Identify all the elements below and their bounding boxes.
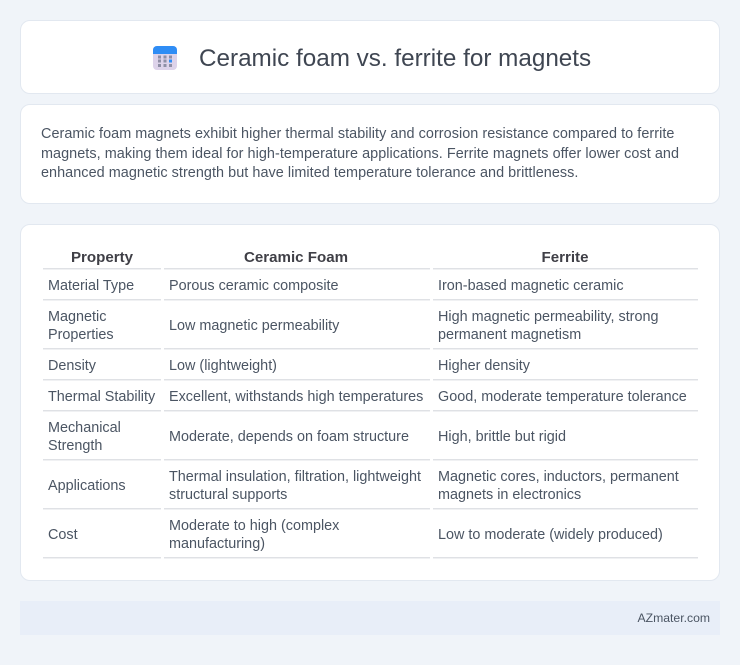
- row: material type: Material Type: [48, 278, 134, 294]
- row: applications: magnets in electronics: [438, 487, 581, 503]
- intro text: enhanced magnetic strength but have limited temperature tolerance and brittleness.: [41, 165, 578, 181]
- row: cost: [48, 518, 663, 552]
- header panel: [20, 20, 720, 94]
- row: magnetic properties: Magnetic: [48, 309, 106, 325]
- row: applications: [48, 469, 679, 503]
- intro text: magnets, making them ideal for high-temperature applications. Ferrite magnets offer lower cost and: [41, 146, 679, 162]
- footer credit: AZmater.com: [638, 611, 710, 625]
- row: thermal stability: Good, moderate temperature tolerance: [438, 389, 687, 405]
- row: magnetic properties: Low magnetic permeability: [169, 318, 339, 334]
- column headers: [71, 249, 588, 266]
- row: applications: Applications: [48, 478, 126, 494]
- row: magnetic properties: High magnetic permeability, strong: [438, 309, 658, 325]
- title: Ceramic foam vs. ferrite for magnets: [199, 45, 591, 72]
- row: cost: Low to moderate (widely produced): [438, 527, 663, 543]
- icon: calendar: [153, 46, 177, 70]
- row: density: [48, 358, 530, 374]
- row: magnetic properties: Properties: [48, 327, 114, 343]
- row: magnetic properties: [48, 309, 658, 343]
- row: thermal stability: Excellent, withstands high temperatures: [169, 389, 423, 405]
- row: density: Low (lightweight): [169, 358, 277, 374]
- row: magnetic properties: permanent magnetism: [438, 327, 581, 343]
- row: applications: Magnetic cores, inductors, permanent: [438, 469, 679, 485]
- row: mechanical strength: Moderate, depends on foam structure: [169, 429, 409, 445]
- intro panel: [20, 104, 720, 204]
- row: density: Density: [48, 358, 96, 374]
- footer bar: [20, 601, 720, 635]
- row: mechanical strength: [48, 420, 566, 454]
- row: cost: Cost: [48, 527, 78, 543]
- row: material type: [48, 278, 624, 294]
- row: mechanical strength: High, brittle but rigid: [438, 429, 566, 445]
- row: cost: manufacturing): [169, 536, 265, 552]
- row: applications: Thermal insulation, filtration, lightweight: [169, 469, 421, 485]
- column headers: Ceramic Foam: [244, 249, 348, 266]
- intro text: Ceramic foam magnets exhibit higher thermal stability and corrosion resistance compared to ferrite: [41, 126, 674, 142]
- intro text: [41, 126, 679, 181]
- row: cost: Moderate to high (complex: [169, 518, 339, 534]
- panel: comparison table: [20, 224, 720, 581]
- row: material type: Iron-based magnetic ceramic: [438, 278, 624, 294]
- row: mechanical strength: Mechanical: [48, 420, 121, 436]
- row: density: Higher density: [438, 358, 530, 374]
- row: mechanical strength: Strength: [48, 438, 102, 454]
- column headers: Ferrite: [542, 249, 588, 266]
- column headers: Property: [71, 249, 133, 266]
- row: thermal stability: [48, 389, 687, 405]
- row: thermal stability: Thermal Stability: [48, 389, 155, 405]
- row: material type: Porous ceramic composite: [169, 278, 339, 294]
- row: applications: structural supports: [169, 487, 287, 503]
